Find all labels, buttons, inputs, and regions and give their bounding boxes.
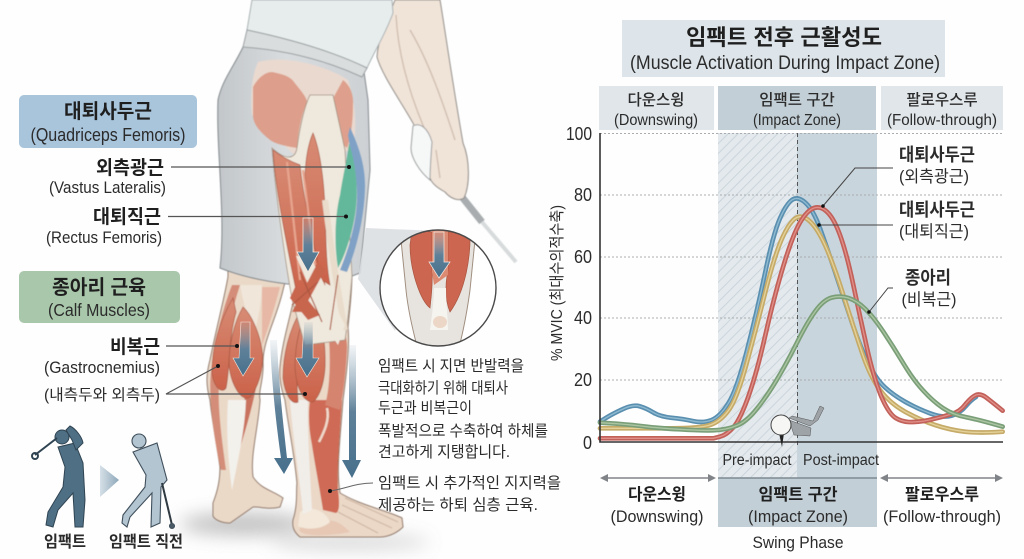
y axis tick labels: 100 [566, 124, 592, 144]
label: gastrocnemius: (Gastrocnemius) [44, 358, 160, 377]
phase header: downswing [599, 86, 714, 130]
thigh muscle strips [273, 133, 345, 330]
label: calf gastrocnemius [902, 268, 956, 309]
y axis tick labels: 0 [583, 433, 592, 453]
blue outer band [340, 127, 365, 272]
impact dashed divider [796, 133, 798, 448]
label: post-impact: Post-impact [803, 452, 880, 469]
y axis tick labels [566, 124, 592, 453]
y axis tick labels: 60 [574, 247, 592, 267]
label: quadriceps vastus lateralis: (외측광근) [899, 167, 969, 186]
label: pre-impact figure: 임팩트 직전 [109, 533, 183, 551]
glove [411, 125, 432, 180]
rear calf muscles [212, 298, 236, 390]
icon: golf ball and club [771, 406, 824, 447]
text block: ground reaction explanation: 임팩트 시 지면 반발력을 [378, 357, 524, 375]
curve: vastus lateralis red [600, 207, 1003, 438]
impact zone shading [718, 133, 877, 478]
phase header: downswing: (Downswing) [614, 112, 698, 129]
front calf muscles [283, 310, 305, 403]
label: gastrocnemius: 비복근 [110, 336, 160, 358]
illustration: golfer legs anatomy [180, 0, 516, 550]
label: rectus femoris: 대퇴직근 [93, 206, 161, 228]
phase header: follow-through [881, 86, 1003, 130]
phase header: impact zone: 임팩트 구간 [759, 91, 835, 109]
magnifier cone [358, 228, 438, 331]
label: quadriceps rectus femoris: (대퇴직근) [899, 222, 969, 241]
gluteal muscle [253, 72, 307, 148]
knee crossing tendons [290, 256, 345, 345]
text block: ground reaction explanation: 폭발적으로 수축하여 하체를 [378, 422, 548, 440]
y axis title: % MVIC (최대수의적수축) [548, 205, 566, 361]
footer label: impact zone [748, 485, 848, 526]
label: vastus lateralis: 외측광근 [96, 157, 164, 179]
label: impact figure: 임팩트 [44, 533, 86, 551]
label: rectus femoris: (Rectus Femoris) [46, 229, 162, 247]
deep calf muscle [309, 400, 342, 513]
footer label: impact zone: 임팩트 구간 [758, 485, 838, 504]
footer label: downswing: (Downswing) [610, 507, 704, 526]
icon: golfer at impact [32, 426, 85, 527]
y axis tick labels: 20 [574, 370, 592, 390]
text block: ground reaction explanation [378, 357, 548, 461]
icon: golfer before impact [122, 434, 174, 528]
label: medial and lateral heads [44, 364, 307, 404]
arrow: downswing span [600, 474, 716, 482]
label: quadriceps vastus lateralis: 대퇴사두근 [899, 145, 975, 165]
arrow: follow-through span [880, 474, 1003, 482]
label: quadriceps vastus lateralis [899, 145, 975, 186]
panel: calf muscles heading: (Calf Muscles) [48, 300, 150, 320]
label: rectus femoris [46, 206, 348, 247]
arrow: front long ground force [342, 345, 361, 478]
phase header: follow-through: 팔로우스루 [906, 91, 978, 109]
label: pre-impact: Pre-impact [722, 452, 792, 469]
phase header: follow-through: (Follow-through) [887, 112, 997, 129]
curve: quadriceps blue [600, 198, 976, 422]
panel: calf muscles heading [19, 271, 180, 323]
label: quadriceps rectus femoris: 대퇴사두근 [899, 200, 975, 220]
footer label: follow-through: (Follow-through) [883, 507, 1001, 526]
line chart: muscle activation [548, 124, 1003, 478]
ground shadow [180, 513, 430, 550]
arm muscle line [396, 15, 455, 178]
arrow: front calf [296, 322, 319, 377]
arrows on muscles [233, 218, 361, 478]
curves [600, 198, 1003, 438]
label: quadriceps rectus femoris [899, 200, 975, 241]
footer label: downswing: 다운스윙 [628, 485, 686, 504]
footer label: impact zone: (Impact Zone) [748, 507, 848, 526]
curve: rectus femoris tan [600, 217, 1003, 432]
leader: calf label [867, 288, 893, 314]
shirt [247, 0, 393, 68]
y axis tick labels: 80 [574, 185, 592, 205]
arrow: progression triangle [100, 465, 119, 497]
arm and hand [377, 0, 468, 200]
text block: ground reaction explanation: 극대화하기 위해 대퇴사 [378, 379, 508, 397]
panel: quadriceps heading: (Quadriceps Femoris) [30, 125, 186, 145]
phase footer: impact band [718, 478, 877, 527]
label: medial and lateral heads: (내측두와 외측두) [44, 386, 160, 404]
label: calf gastrocnemius: (비복근) [902, 290, 956, 309]
upper right muscle [330, 80, 353, 148]
panel: quadriceps heading [19, 95, 197, 148]
chart title: (Muscle Activation During Impact Zone) [630, 53, 940, 74]
panel: quadriceps heading: 대퇴사두근 [64, 100, 152, 123]
grid lines [600, 134, 1003, 380]
text block: ground reaction explanation: 두근과 비복근이 [378, 399, 472, 417]
footer label: follow-through [883, 485, 1001, 526]
phase header: impact zone: (Impact Zone) [753, 112, 841, 129]
pale skin overlay at hip [251, 60, 355, 160]
x axis title: Swing Phase [752, 533, 844, 552]
phase header: downswing: 다운스윙 [627, 91, 685, 109]
panel: calf muscles heading: 종아리 근육 [52, 276, 146, 299]
footer label: follow-through: 팔로우스루 [905, 485, 979, 504]
golf club shaft [462, 197, 516, 262]
leader: vastus lateralis label [821, 168, 893, 208]
shorts [218, 45, 370, 284]
label: gastrocnemius [44, 336, 239, 377]
thigh base [272, 95, 352, 345]
leader: rectus femoris label [817, 223, 893, 227]
green vastus lateralis [336, 143, 357, 268]
text block: deep muscle note [328, 474, 561, 514]
curve: calf green [600, 297, 1003, 430]
chart title: 임팩트 전후 근활성도 [686, 25, 882, 50]
front leg [280, 270, 403, 537]
footer label: downswing [610, 485, 704, 526]
text block: deep muscle note: 제공하는 하퇴 심층 근육. [378, 496, 538, 514]
label: vastus lateralis [49, 157, 351, 197]
label: calf gastrocnemius: 종아리 [905, 268, 951, 288]
text block: deep muscle note: 임팩트 시 추가적인 지지력을 [378, 474, 561, 492]
label: vastus lateralis: (Vastus Lateralis) [49, 179, 166, 197]
arrow: thigh contraction [297, 218, 319, 272]
text block: ground reaction explanation: 견고하게 지탱합니다. [378, 443, 510, 461]
chart title [622, 20, 945, 77]
axes [600, 133, 1003, 442]
y axis tick labels: 40 [574, 308, 592, 328]
rear leg [207, 262, 290, 523]
belt [243, 30, 367, 77]
phase header: impact zone [718, 86, 876, 130]
magnifier: knee detail [380, 230, 496, 350]
arrow: rear long ground force [270, 340, 293, 474]
arrow: rear calf [233, 322, 254, 376]
